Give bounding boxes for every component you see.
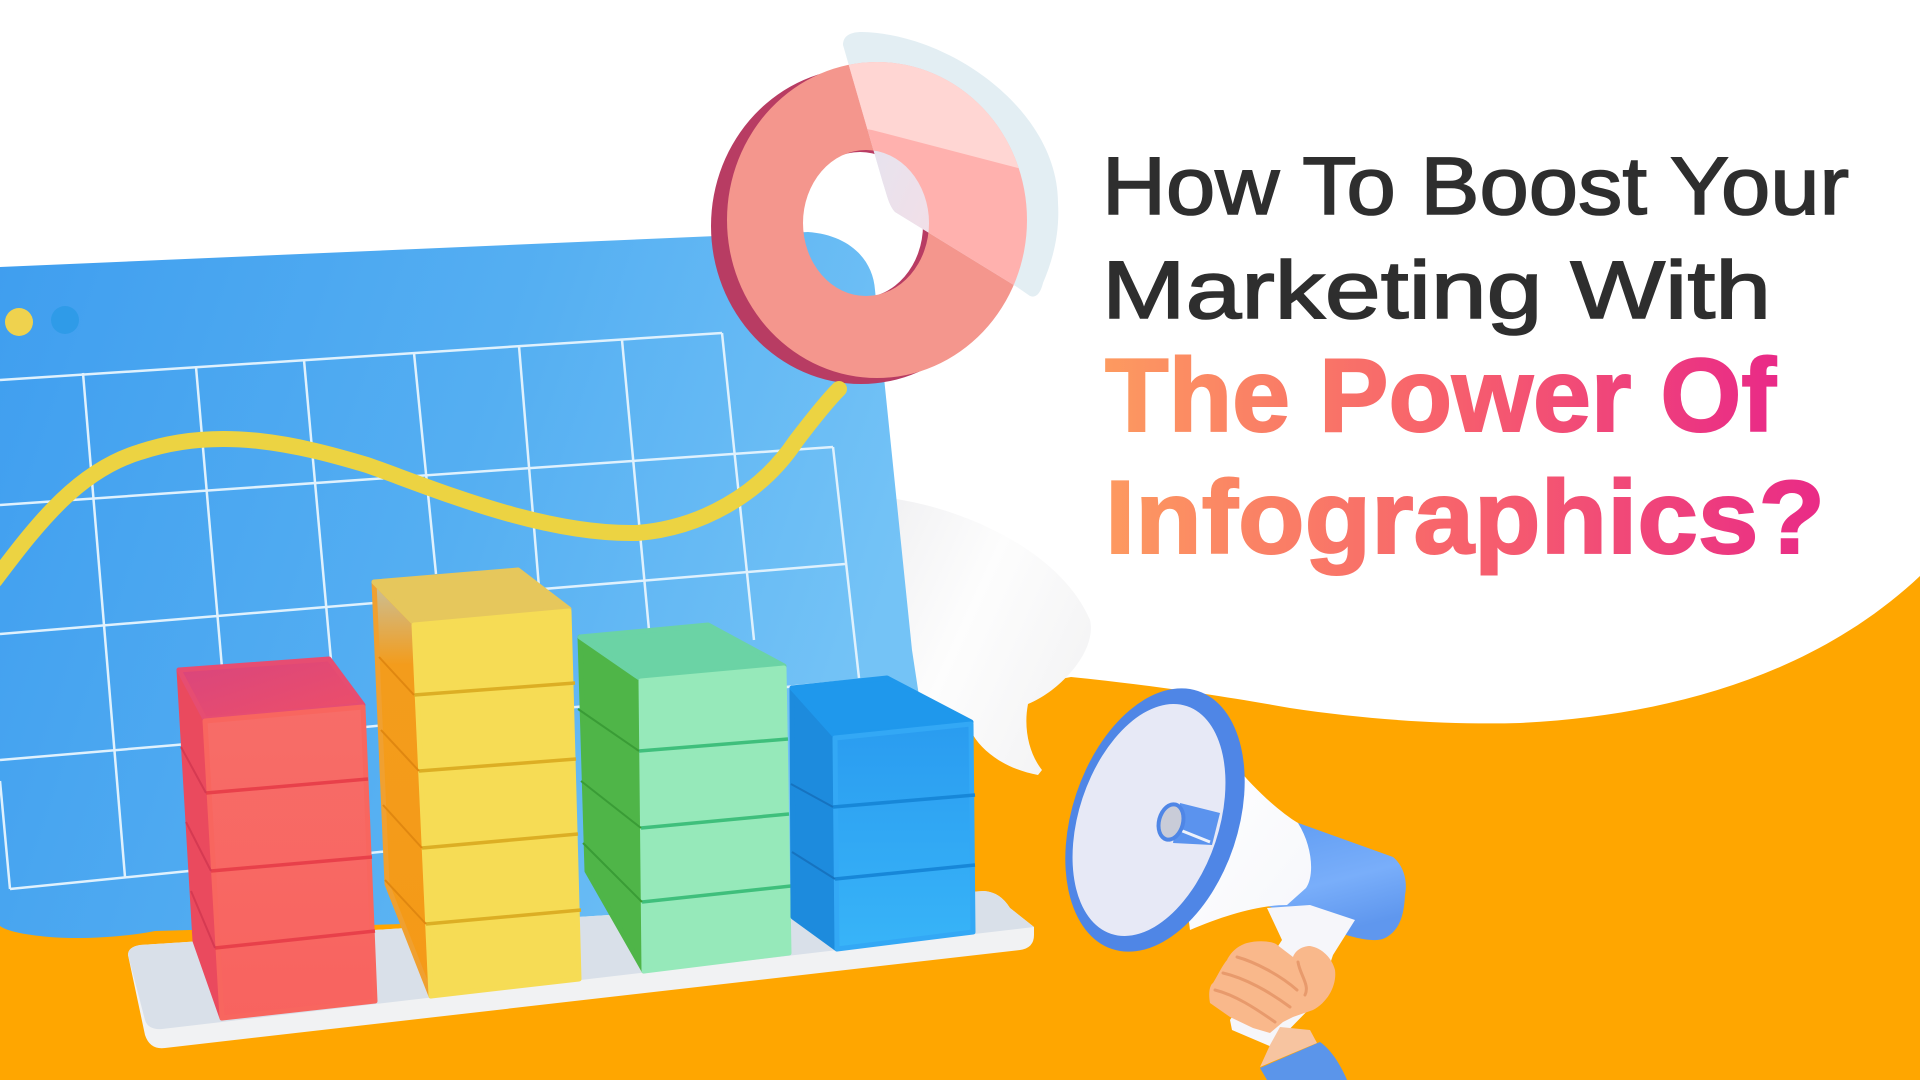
plate edge — [128, 891, 1034, 1048]
yellow bar — [374, 570, 581, 996]
speaker cap — [1152, 799, 1190, 845]
tinted slice under glass — [848, 62, 1027, 285]
hand — [1209, 941, 1335, 1033]
megaphone inside — [1045, 684, 1253, 956]
donut front face — [727, 62, 1027, 378]
wrist — [1260, 1027, 1317, 1067]
donut side wall — [711, 68, 1011, 384]
megaphone barrel — [1265, 820, 1406, 940]
blue bar — [791, 678, 975, 949]
icon: donut chart with glass slice — [711, 32, 1058, 384]
heading line 2: Marketing With — [1102, 245, 1771, 336]
tube highlight — [1180, 830, 1210, 842]
cuff — [1260, 1042, 1347, 1080]
heading line 3: The Power Of — [1105, 338, 1776, 454]
speaker tube — [1173, 803, 1220, 845]
panel: blue browser window with line chart — [0, 232, 950, 938]
title: heading text — [1102, 141, 1849, 576]
plate top — [128, 891, 1034, 1029]
handle — [1230, 905, 1355, 1047]
bar chart: 3D stacked bars — [179, 570, 975, 1018]
finger creases — [1215, 957, 1306, 1022]
base plate — [128, 891, 1034, 1048]
window dot: yellow — [5, 308, 33, 336]
icon: megaphone held by hand — [1033, 665, 1406, 1080]
window dot: blue — [51, 306, 79, 334]
heading line 1: How To Boost Your — [1102, 141, 1849, 232]
megaphone cone — [1180, 765, 1311, 930]
megaphone rim — [1033, 665, 1277, 975]
background: orange wave — [0, 576, 1920, 1080]
icon: white speech bubble — [880, 497, 1091, 775]
yellow trend line — [0, 389, 839, 580]
green bar — [578, 625, 791, 971]
window body — [0, 232, 950, 938]
chart grid — [0, 333, 860, 889]
heading line 4: Infographics? — [1105, 460, 1825, 576]
red bar — [179, 659, 375, 1018]
glass slice — [843, 32, 1058, 297]
